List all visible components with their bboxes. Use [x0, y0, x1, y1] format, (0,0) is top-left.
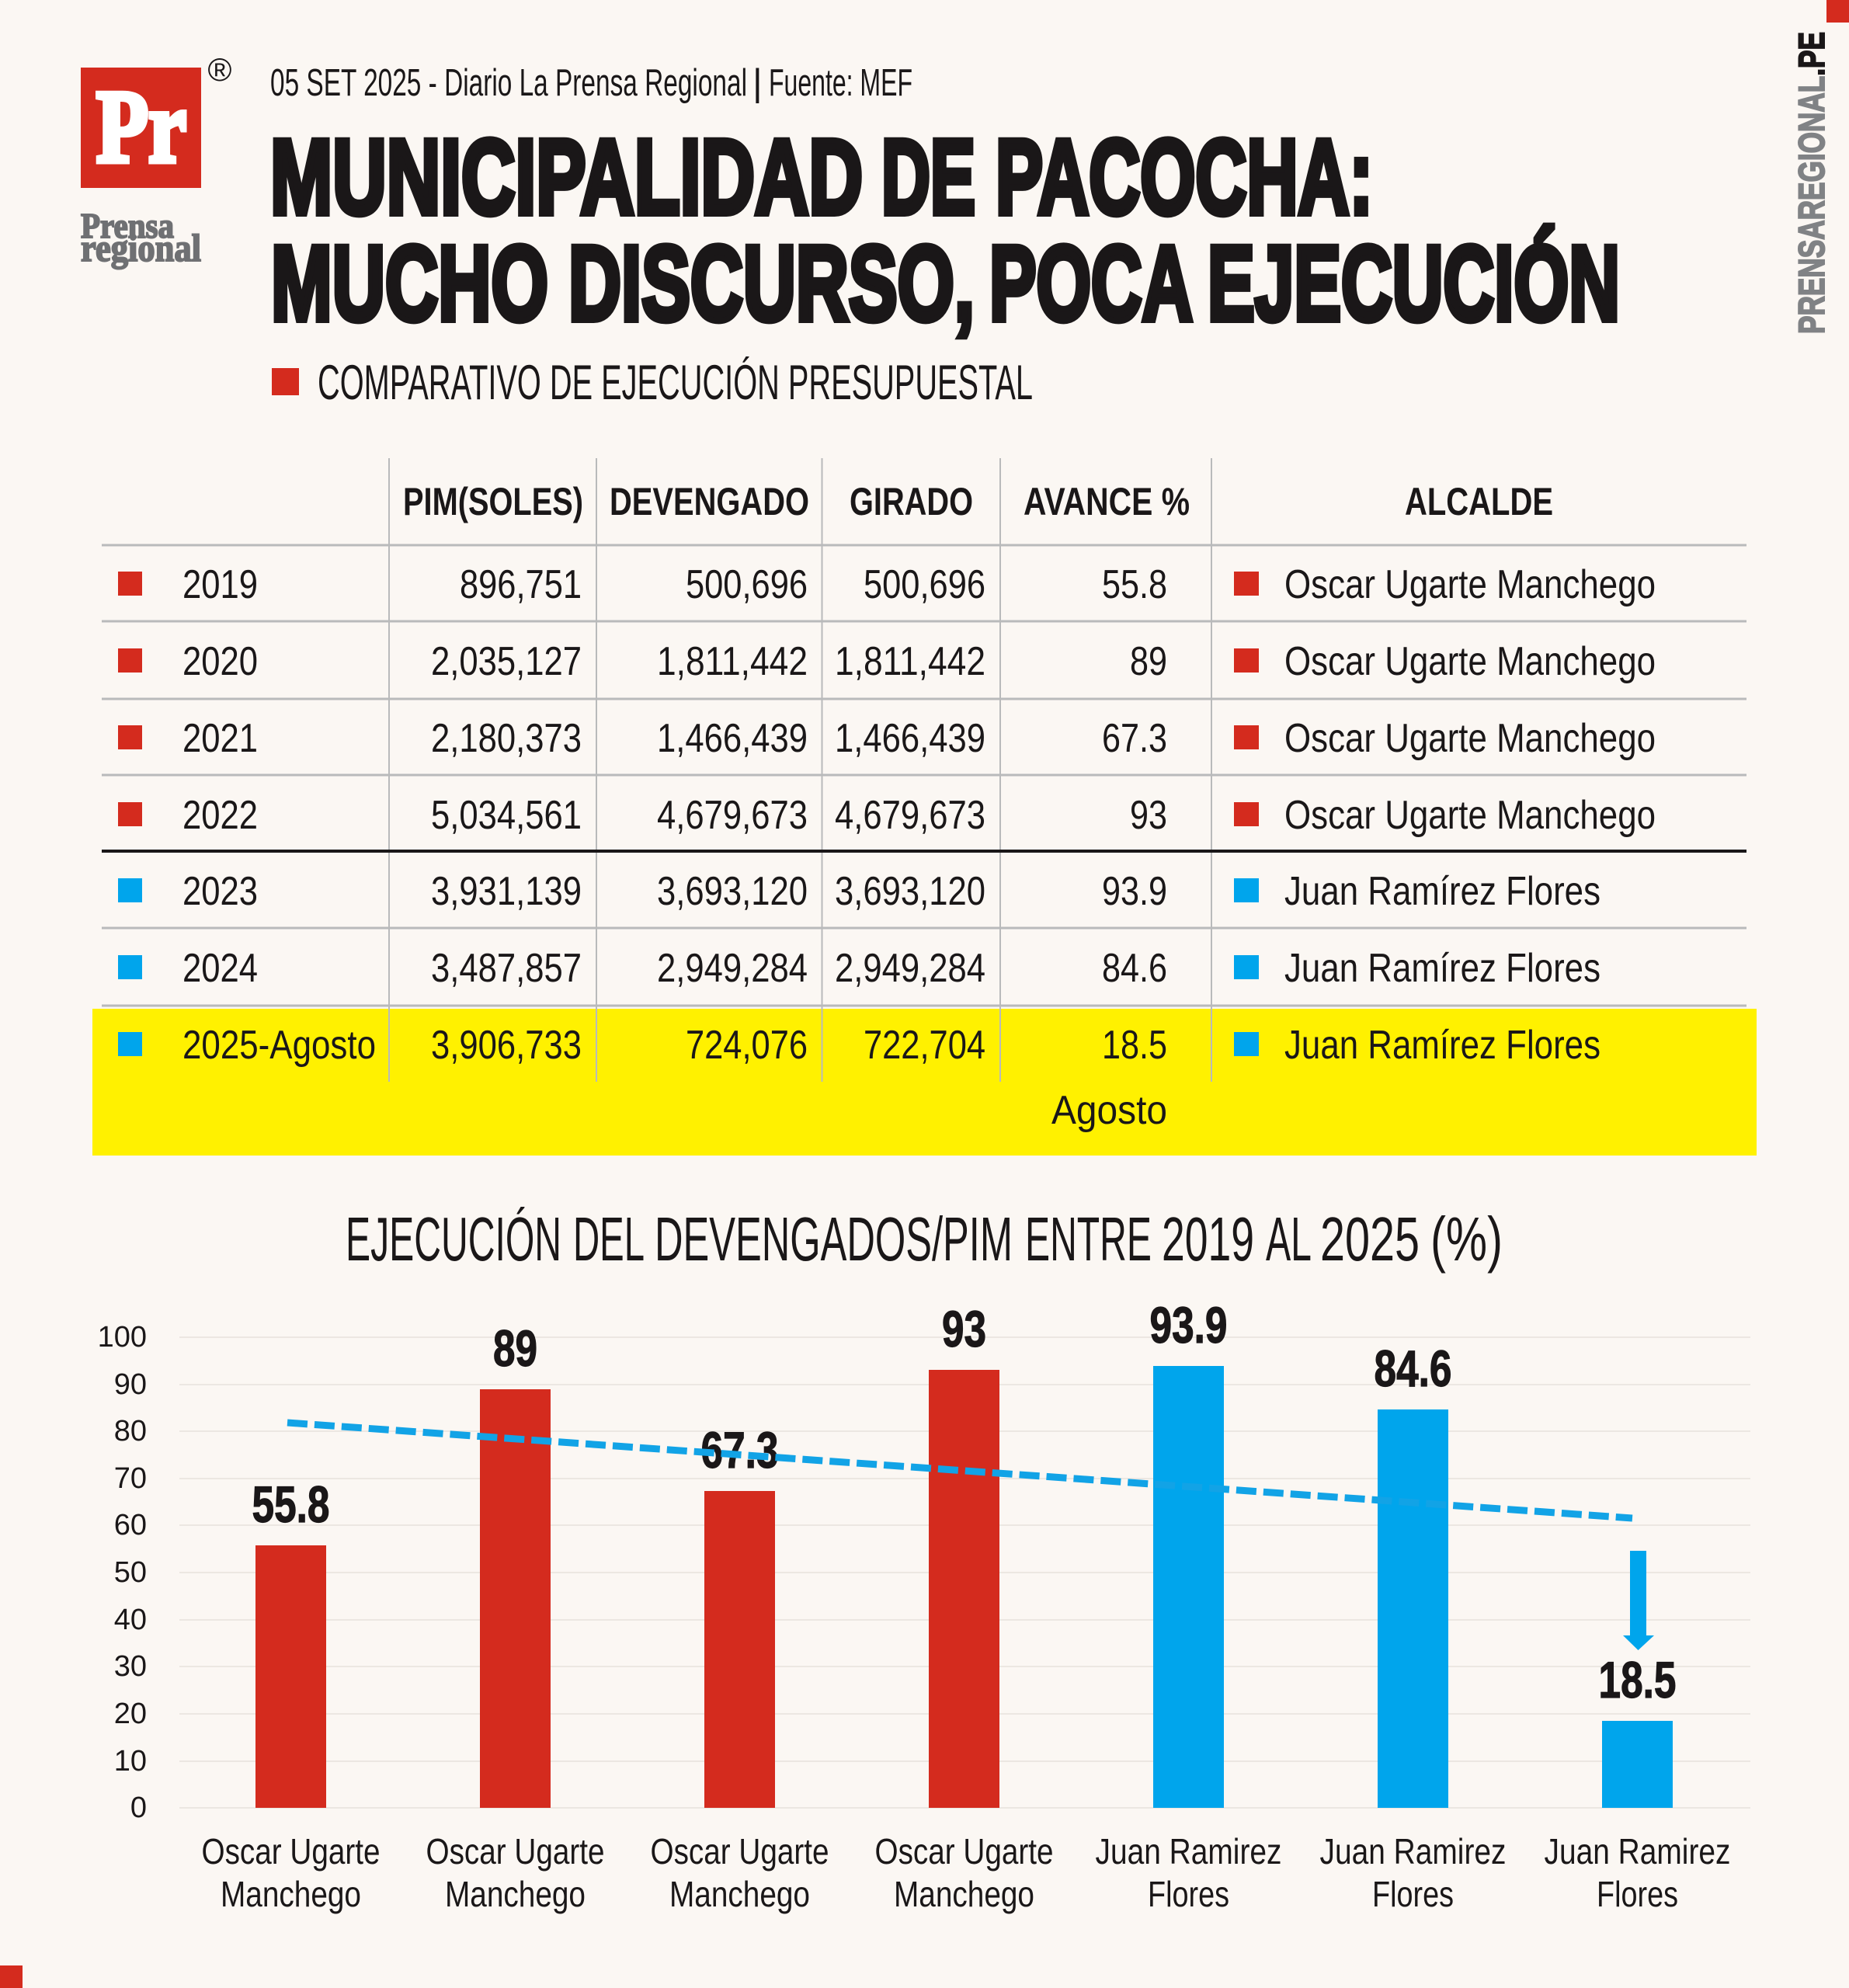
row 2019: 500,696 — [864, 562, 985, 607]
bar: 2020 Oscar Ugarte 89: Manchego — [445, 1874, 586, 1914]
chart title — [346, 1204, 1503, 1274]
title: MUNICIPALIDAD — [270, 118, 863, 237]
row 2025-Agosto: 18.5 — [1102, 1023, 1167, 1068]
row 2019: Oscar Ugarte Manchego — [1284, 562, 1656, 607]
row 2023: 3,693,120 — [835, 869, 985, 914]
table — [118, 480, 1656, 1133]
row 2020: 89 — [1130, 639, 1167, 684]
row 2022 — [118, 793, 1656, 838]
bar: 2022 Oscar Ugarte 93: 93 — [942, 1300, 986, 1357]
row 2024 — [118, 946, 1600, 991]
row 2021: 1,466,439 — [657, 716, 808, 761]
row 2024: 2,949,284 — [835, 946, 985, 991]
logo: regional — [81, 226, 201, 269]
bar: 2020 Oscar Ugarte 89 — [426, 1319, 604, 1914]
row 2019: 896,751 — [460, 562, 582, 607]
highlight band: 2025 row — [92, 1009, 1757, 1156]
row 2021: 2,180,373 — [431, 716, 582, 761]
row 2019 — [118, 562, 1656, 607]
row 2025-Agosto: 2025-Agosto — [182, 1023, 376, 1068]
y axis labels: 100 — [98, 1321, 147, 1354]
bar: 2020 Oscar Ugarte 89: Oscar Ugarte — [426, 1831, 604, 1872]
logo: ® — [208, 51, 232, 88]
bar: 2024 Juan Ramirez 84.6: Juan Ramirez — [1320, 1831, 1507, 1872]
row 2025-Agosto: Agosto — [1051, 1088, 1167, 1133]
row 2021 — [118, 716, 1656, 761]
chart title: 2019 — [1162, 1204, 1254, 1274]
row 2022: 93 — [1130, 793, 1167, 838]
table header — [403, 480, 1553, 523]
row 2020: 2020 — [182, 639, 258, 684]
row 2022: 4,679,673 — [835, 793, 985, 838]
table header: AVANCE % — [1024, 480, 1190, 523]
title: POCA — [989, 224, 1193, 343]
row 2023: 2023 — [182, 869, 258, 914]
row 2025-Agosto — [118, 1023, 1600, 1133]
y axis labels: 0 — [130, 1792, 147, 1824]
row 2020: Oscar Ugarte Manchego — [1284, 639, 1656, 684]
row 2023 — [118, 869, 1600, 914]
row 2024: 2024 — [182, 946, 258, 991]
date and source line: 05 SET 2025 - Diario La Prensa Regional — [270, 62, 747, 104]
dashed trend line — [287, 1423, 1632, 1518]
chart title: 2025 — [1320, 1204, 1420, 1274]
y axis labels: 60 — [114, 1509, 147, 1541]
table header: ALCALDE — [1405, 480, 1553, 523]
bar: 2023 Juan Ramirez 93.9: 93.9 — [1149, 1296, 1227, 1354]
chart title: DEL — [573, 1204, 645, 1274]
row 2020: 2,035,127 — [431, 639, 582, 684]
row 2022: Oscar Ugarte Manchego — [1284, 793, 1656, 838]
table header: GIRADO — [850, 480, 973, 523]
title: DE — [881, 118, 975, 237]
bar: 2019 Oscar Ugarte 55.8: Oscar Ugarte — [202, 1831, 381, 1872]
bar: 2021 Oscar Ugarte 67.3 — [651, 1421, 829, 1914]
title: MUCHO — [271, 224, 548, 343]
row 2025-Agosto: Juan Ramírez Flores — [1284, 1023, 1600, 1068]
row 2023: 93.9 — [1102, 869, 1167, 914]
row 2025-Agosto: 3,906,733 — [431, 1023, 582, 1068]
y axis labels — [98, 1321, 147, 1824]
bar: 2024 Juan Ramirez 84.6: 84.6 — [1375, 1340, 1452, 1397]
title: EJECUCIÓN — [1208, 224, 1620, 343]
bar: 2025 Juan Ramirez 18.5 — [1544, 1651, 1730, 1914]
y axis labels: 30 — [114, 1650, 147, 1683]
bar: 2022 Oscar Ugarte 93 — [874, 1300, 1053, 1914]
bar chart — [98, 1296, 1730, 1914]
bar: 2020 Oscar Ugarte 89: 89 — [493, 1319, 537, 1377]
y axis labels: 40 — [114, 1604, 147, 1636]
y axis labels: 80 — [114, 1415, 147, 1448]
bar: 2021 Oscar Ugarte 67.3: Manchego — [669, 1874, 810, 1914]
logo: Prensa — [81, 206, 174, 245]
row 2024: 3,487,857 — [431, 946, 582, 991]
chart title: DEVENGADOS/PIM — [655, 1204, 1013, 1274]
title: PACOCHA: — [996, 118, 1373, 237]
y axis labels: 70 — [114, 1462, 147, 1495]
corner accent: top right — [1826, 0, 1849, 23]
row 2021: 2021 — [182, 716, 258, 761]
arrow: down to 18.5 — [1623, 1551, 1654, 1650]
table header: DEVENGADO — [610, 480, 809, 523]
row 2024: 84.6 — [1102, 946, 1167, 991]
row 2023: Juan Ramírez Flores — [1284, 869, 1600, 914]
row 2019: 500,696 — [686, 562, 808, 607]
row 2024: Juan Ramírez Flores — [1284, 946, 1600, 991]
row 2022: 2022 — [182, 793, 258, 838]
bar: 2025 Juan Ramirez 18.5: Flores — [1597, 1874, 1678, 1914]
bar: 2023 Juan Ramirez 93.9: Juan Ramirez — [1095, 1831, 1281, 1872]
bar: 2021 Oscar Ugarte 67.3: 67.3 — [700, 1421, 778, 1479]
bar: 2021 Oscar Ugarte 67.3: Oscar Ugarte — [651, 1831, 829, 1872]
row 2022: 4,679,673 — [657, 793, 808, 838]
chart title: AL — [1266, 1204, 1312, 1274]
row 2020 — [118, 639, 1656, 684]
logo — [81, 51, 232, 269]
corner accent: bottom left — [0, 1965, 23, 1988]
row 2025-Agosto: 722,704 — [864, 1023, 985, 1068]
row 2022: 5,034,561 — [431, 793, 582, 838]
title: DISCURSO, — [568, 224, 975, 343]
title — [270, 118, 1620, 343]
row 2019: 55.8 — [1102, 562, 1167, 607]
bar: 2019 Oscar Ugarte 55.8: 55.8 — [252, 1475, 329, 1533]
row 2019: 2019 — [182, 562, 258, 607]
y axis labels: 10 — [114, 1745, 147, 1778]
row 2020: 1,811,442 — [657, 639, 808, 684]
bar: 2024 Juan Ramirez 84.6: Flores — [1372, 1874, 1454, 1914]
row 2024: 2,949,284 — [657, 946, 808, 991]
bar: 2023 Juan Ramirez 93.9 — [1095, 1296, 1281, 1914]
y axis labels: 20 — [114, 1698, 147, 1730]
row 2020: 1,811,442 — [835, 639, 985, 684]
row 2023: 3,693,120 — [657, 869, 808, 914]
chart title: EJECUCIÓN — [346, 1204, 561, 1274]
row 2021: Oscar Ugarte Manchego — [1284, 716, 1656, 761]
row 2025-Agosto: 724,076 — [686, 1023, 808, 1068]
chart title: (%) — [1430, 1204, 1503, 1274]
y axis labels: 90 — [114, 1368, 147, 1401]
bar: 2025 Juan Ramirez 18.5: 18.5 — [1598, 1651, 1676, 1708]
date and source line: Fuente: MEF — [769, 62, 912, 104]
bar: 2022 Oscar Ugarte 93: Oscar Ugarte — [874, 1831, 1053, 1872]
row 2021: 1,466,439 — [835, 716, 985, 761]
date and source line: | — [752, 62, 763, 104]
bar: 2019 Oscar Ugarte 55.8 — [202, 1475, 381, 1914]
bar: 2025 Juan Ramirez 18.5: Juan Ramirez — [1544, 1831, 1730, 1872]
row 2023: 3,931,139 — [431, 869, 582, 914]
bar: 2019 Oscar Ugarte 55.8: Manchego — [221, 1874, 361, 1914]
bar: 2023 Juan Ramirez 93.9: Flores — [1148, 1874, 1229, 1914]
chart title: ENTRE — [1025, 1204, 1152, 1274]
bar: 2024 Juan Ramirez 84.6 — [1320, 1340, 1507, 1914]
row 2021: 67.3 — [1102, 716, 1167, 761]
logo: Pr — [96, 69, 186, 184]
y axis labels: 50 — [114, 1556, 147, 1589]
subtitle: COMPARATIVO DE EJECUCIÓN PRESUPUESTAL — [318, 356, 1033, 410]
subtitle — [272, 356, 1033, 410]
table header: PIM(SOLES) — [403, 480, 583, 523]
bar: 2022 Oscar Ugarte 93: Manchego — [894, 1874, 1034, 1914]
